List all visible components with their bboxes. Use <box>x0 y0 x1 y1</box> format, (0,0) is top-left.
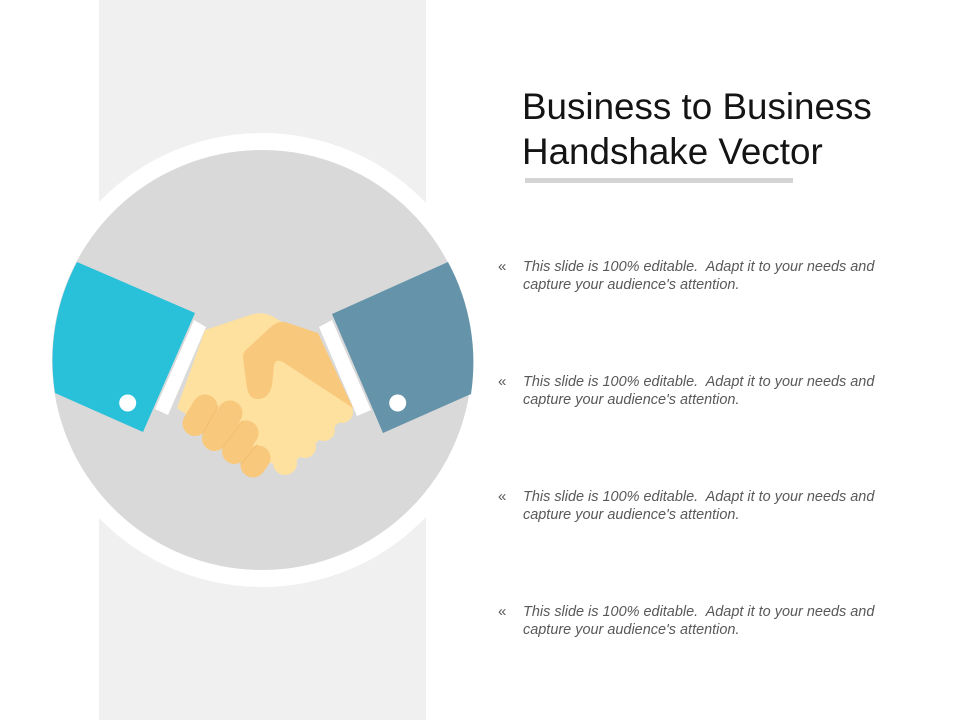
grey circle <box>52 150 472 570</box>
text block 4: « <box>498 603 506 620</box>
text block 3: This slide is 100% editable. Adapt it to your needs and <box>523 489 874 505</box>
text block 1: « <box>498 258 506 275</box>
title: Handshake Vector <box>522 131 823 172</box>
text block 2: This slide is 100% editable. Adapt it to your needs and <box>523 374 874 390</box>
left white cuff <box>155 320 206 415</box>
text block 3 <box>498 488 875 523</box>
white circle ring <box>35 133 489 587</box>
right white cuff <box>319 320 371 416</box>
title underline <box>525 178 793 183</box>
text block 1 <box>498 258 875 293</box>
text block 4: This slide is 100% editable. Adapt it to your needs and <box>523 604 874 620</box>
fingers <box>195 406 258 465</box>
right sleeve <box>332 262 473 433</box>
text block 4: capture your audience's attention. <box>523 622 740 638</box>
left sleeve <box>53 262 195 432</box>
text block 3: capture your audience's attention. <box>523 507 740 523</box>
text block 1: capture your audience's attention. <box>523 277 740 293</box>
text block 2: « <box>498 373 506 390</box>
title: Business to Business <box>522 86 872 127</box>
text block 4 <box>498 603 875 638</box>
text block 2 <box>498 373 875 408</box>
dark hand and thumb <box>243 322 353 408</box>
light hand <box>177 313 353 475</box>
text block 2: capture your audience's attention. <box>523 392 740 408</box>
background band <box>99 0 426 720</box>
text block 3: « <box>498 488 506 505</box>
title <box>522 86 872 172</box>
text block 1: This slide is 100% editable. Adapt it to your needs and <box>523 259 874 275</box>
